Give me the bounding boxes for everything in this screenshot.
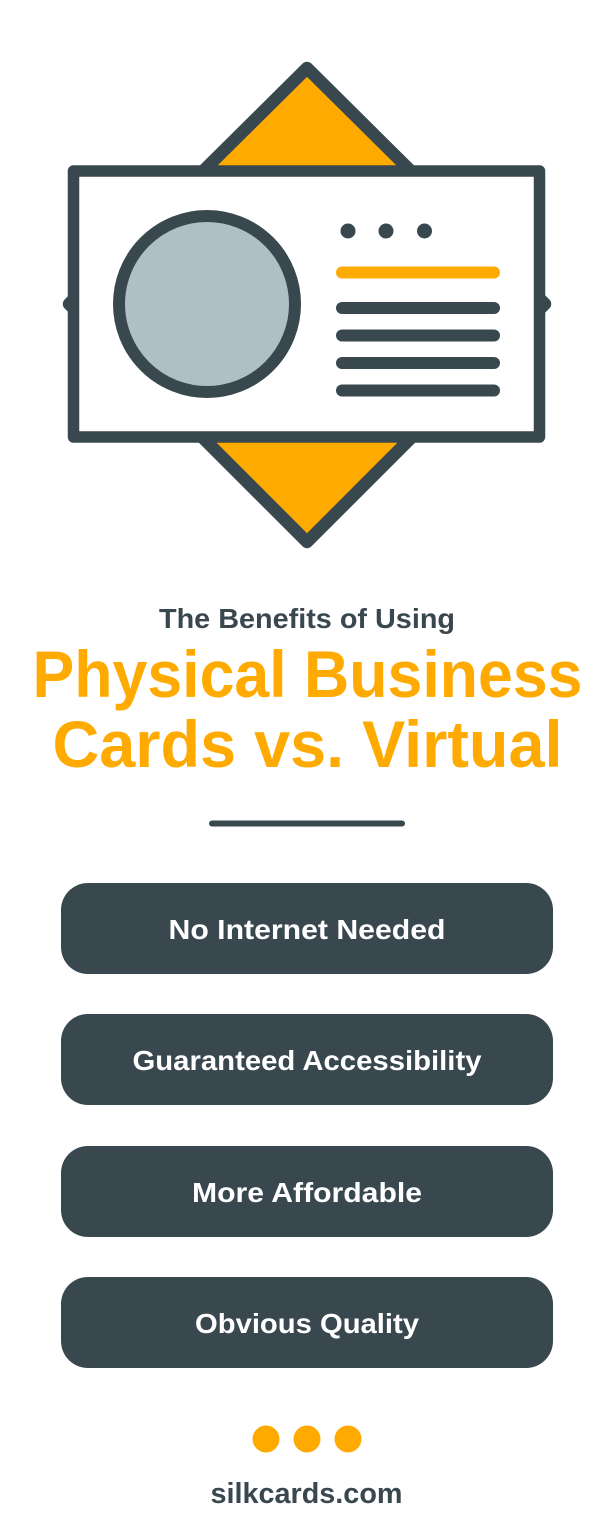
benefit pill: Obvious Quality: [61, 1277, 553, 1368]
icon: three small dots: [340, 224, 432, 238]
subtitle: The Benefits of Using: [159, 603, 455, 634]
benefit pill: More Affordable: [61, 1146, 553, 1237]
footer dots: [252, 1426, 362, 1452]
title: Physical Business: [32, 637, 582, 711]
icon: orange text line: [336, 266, 500, 278]
icon: orange diamond behind card: [69, 68, 545, 542]
icon: profile circle: [119, 216, 295, 392]
footer website: silkcards.com: [210, 1478, 402, 1510]
benefit pill: No Internet Needed: No Internet Needed: [168, 914, 446, 945]
icon: card body: [74, 171, 540, 437]
divider: [209, 820, 405, 826]
benefit pill: Guaranteed Accessibility: [61, 1014, 553, 1105]
benefit pill: Guaranteed Accessibility: Guaranteed Accessibility: [132, 1045, 482, 1076]
benefit pill: No Internet Needed: [61, 883, 553, 974]
title: Cards vs. Virtual: [52, 707, 562, 781]
icon: dark text lines: [336, 302, 500, 396]
icon: business card illustration: [69, 68, 545, 542]
benefit pill: More Affordable: More Affordable: [192, 1177, 422, 1208]
benefit pill: Obvious Quality: Obvious Quality: [195, 1308, 419, 1339]
title: [32, 637, 582, 781]
